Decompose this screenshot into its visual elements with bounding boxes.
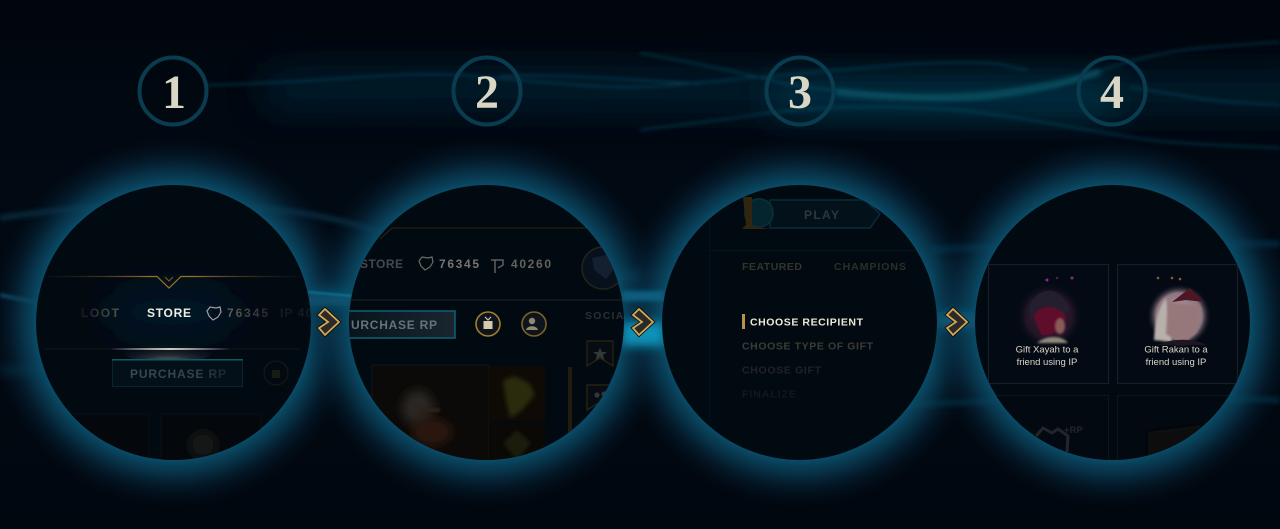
tab bar backdrop (102, 286, 242, 338)
text: LOOT: LOOT (81, 306, 120, 320)
text: essence amount: 76345 (439, 257, 479, 271)
icon: profile avatar (582, 247, 624, 289)
step badge 3 (766, 58, 834, 124)
panel: step 1 store tab: PURCHASE RP (130, 367, 226, 381)
icon: social gift (522, 312, 546, 336)
image: fist tile (489, 366, 545, 421)
text: card label: friend using IP (1146, 357, 1206, 368)
light wisps (0, 42, 1280, 405)
image: champion tile (372, 365, 489, 465)
text: CHOOSE RECIPIENT: CHOOSE RECIPIENT (750, 316, 864, 328)
panel: step 4 gift choices (975, 185, 1250, 476)
panel: step 1 store tab (36, 185, 312, 474)
panel: step 2 gift button (335, 185, 632, 468)
image: emblem tile (489, 423, 545, 460)
play button: PLAY (804, 208, 839, 222)
marker bar (742, 314, 745, 329)
icon: banner people (587, 385, 613, 410)
panel: step 3 recipient (662, 185, 937, 460)
text: essence amount: 76345 (227, 306, 268, 320)
arrow 2 (633, 309, 653, 335)
card: RP bundle: +RP (1064, 425, 1083, 436)
card: Gift Xayah (988, 264, 1108, 384)
icon: League logo (742, 197, 773, 229)
text: CHAMPIONS: CHAMPIONS (834, 261, 906, 273)
tab glow (126, 350, 209, 359)
text: CHOOSE TYPE OF GIFT: CHOOSE TYPE OF GIFT (742, 340, 874, 352)
step badge 4: 4 (1100, 66, 1124, 119)
step badge 1: 1 (162, 66, 186, 119)
card: chest (1118, 396, 1238, 476)
icon: gift (476, 312, 500, 336)
play button (770, 200, 880, 228)
text: card label: Gift Rakan to a (1144, 344, 1208, 356)
lower store tiles (70, 414, 262, 460)
text: CHOOSE GIFT: CHOOSE GIFT (742, 364, 822, 376)
step badge 4 (1078, 58, 1146, 124)
top frame line (380, 228, 600, 239)
panel: step 2 gift button: URCHASE RP (351, 318, 437, 332)
card: RP bundle (988, 396, 1108, 476)
icon: essence (419, 257, 433, 270)
arrow 1 (319, 309, 339, 335)
arrow 3 (947, 309, 967, 335)
icon: essence (207, 307, 221, 320)
text: SOCIAL: SOCIAL (585, 310, 632, 322)
text: IP amount: 40260 (511, 257, 551, 271)
button: purchase RP (335, 311, 455, 338)
step badge 2 (454, 58, 520, 124)
button: purchase RP (112, 360, 242, 386)
text: cut-off RP: IP 40 (280, 306, 312, 320)
text: STORE: STORE (360, 257, 403, 271)
icon: banner star (587, 341, 613, 366)
card: Gift Rakan (1118, 264, 1238, 384)
text: FEATURED: FEATURED (742, 261, 802, 273)
portrait: Xayah (1016, 276, 1082, 349)
step badge 1 (140, 58, 206, 124)
gold tab line with chevron (45, 276, 300, 288)
text: STORE: STORE (147, 306, 191, 320)
step badge 2: 2 (475, 66, 499, 119)
portrait: Rakan (1147, 277, 1211, 348)
icon: gift dim (264, 361, 288, 385)
bright light between circles (308, 292, 977, 334)
circle glow halos (0, 138, 1280, 508)
step badge 3: 3 (788, 66, 812, 119)
icon: IP (491, 260, 503, 273)
scrollbar (568, 367, 572, 433)
text: card label: Gift Xayah to a (1016, 344, 1079, 356)
text: card label: friend using IP (1017, 357, 1077, 368)
text: FINALIZE: FINALIZE (742, 388, 796, 400)
